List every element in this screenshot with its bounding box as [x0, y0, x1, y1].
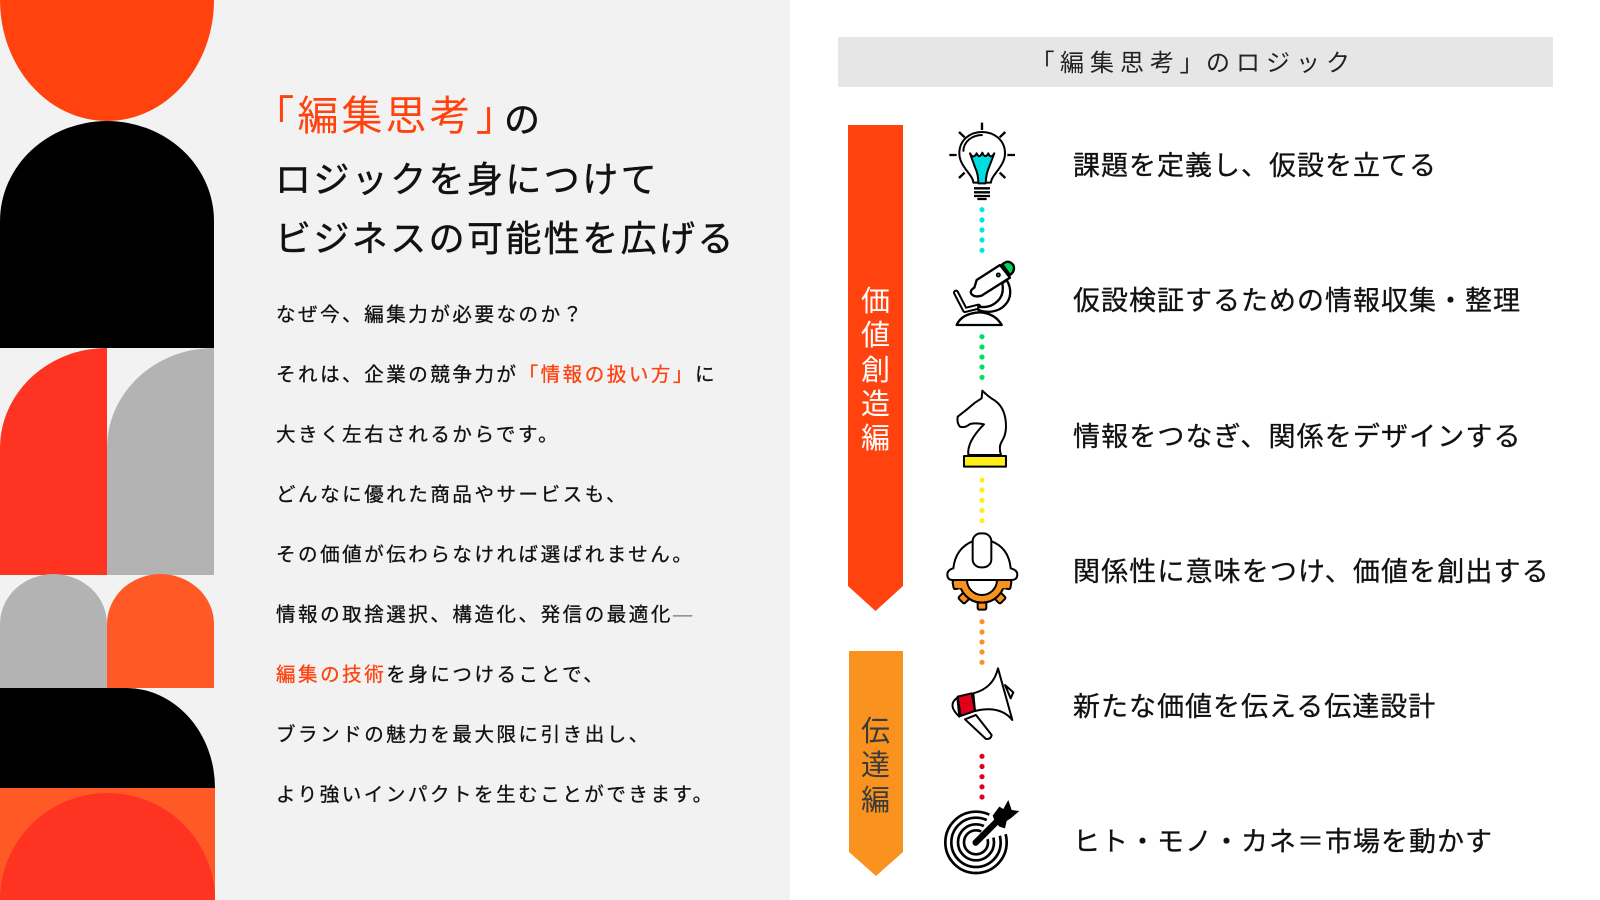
- body text: why editing matters: より強いインパクトを生むことができます。: [276, 784, 715, 806]
- panel: left introduction background: [0, 0, 790, 900]
- heading: main title: [273, 93, 736, 259]
- body text: why editing matters: どんなに優れた商品やサービスも、: [276, 484, 628, 506]
- body text: why editing matters: [276, 304, 717, 806]
- arrow label: 伝達編: 伝達編: [861, 716, 890, 817]
- body text: why editing matters: なぜ今、編集力が必要なのか？: [276, 304, 585, 326]
- step text 1: 課題を定義し、仮設を立てる: [1073, 151, 1437, 181]
- title line 2: ロジックを身につけて: [275, 159, 659, 200]
- header text: 「編集思考」: [1042, 50, 1198, 77]
- header text: のロジック: [1206, 50, 1356, 77]
- body text: why editing matters: 編集の技術を身につけることで、: [276, 664, 605, 686]
- decorative geometric shape column: [0, 0, 215, 900]
- title line 1: 「編集思考」: [273, 93, 500, 139]
- dotted connector: red: [979, 754, 985, 800]
- step text 5: 新たな価値を伝える伝達設計: [1073, 692, 1436, 722]
- body text: why editing matters: 情報の取捨選択、構造化、発信の最適化—: [276, 604, 695, 626]
- panel heading: logic header bar: [838, 37, 1553, 87]
- icon: target with arrow: [945, 796, 1027, 873]
- icon: megaphone: [952, 668, 1013, 739]
- dotted connector: orange: [979, 619, 985, 665]
- icon: chess knight: [957, 391, 1006, 467]
- body text: why editing matters: それは、企業の競争力が「情報の扱い方」に: [276, 364, 717, 386]
- header text: [1042, 50, 1356, 77]
- icon: light bulb: [949, 123, 1015, 199]
- title line 3: ビジネスの可能性を広げる: [275, 218, 736, 259]
- step text 2: 仮設検証するための情報収集・整理: [1073, 286, 1521, 316]
- step text 6: ヒト・モノ・カネ＝市場を動かす: [1073, 827, 1493, 857]
- icon: hard hat and gear: [947, 533, 1017, 610]
- step text 4: 関係性に意味をつけ、価値を創出する: [1073, 557, 1550, 587]
- dotted connector: cyan: [979, 207, 985, 253]
- arrow label: 価値創造編: 価値創造編: [861, 286, 890, 455]
- arrow: value creation section: [848, 125, 903, 611]
- body text: why editing matters: ブランドの魅力を最大限に引き出し、: [276, 724, 651, 746]
- title line 1: の: [504, 99, 540, 140]
- dotted connector: yellow: [979, 477, 985, 523]
- body text: why editing matters: 大きく左右されるからです。: [276, 424, 560, 446]
- step text 3: 情報をつなぎ、関係をデザインする: [1073, 422, 1522, 452]
- body text: why editing matters: その価値が伝わらなければ選ばれません。: [276, 544, 694, 566]
- dotted connector: green: [979, 334, 985, 380]
- arrow: communication section: [849, 651, 903, 876]
- icon: microscope: [956, 262, 1014, 325]
